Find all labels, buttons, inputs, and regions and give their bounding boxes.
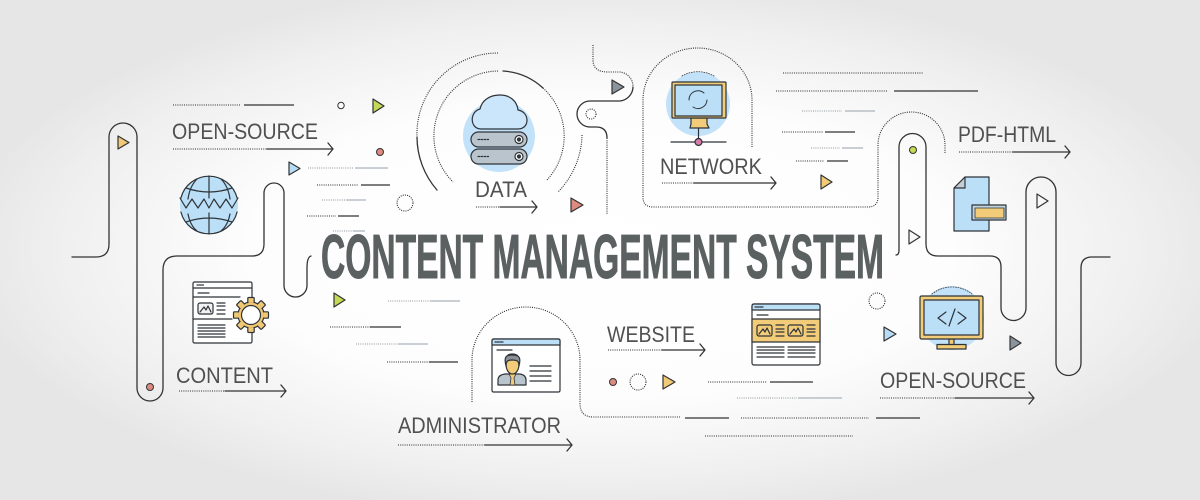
S-curve connector [577,45,633,215]
label: website: WEBSITE [607,322,695,347]
left connector line [72,123,311,401]
marker: triangles [118,80,1048,389]
label: content: CONTENT [176,363,273,388]
right connector line [896,134,1110,376]
icon: cloud server [463,95,535,172]
text rules: upper left [173,105,390,231]
label: pdf-html [958,122,1070,158]
network dotted frame [643,48,945,207]
gear [234,298,268,332]
text rules: lower right [685,382,920,436]
administrator dotted frame [472,307,680,417]
icon: content window and gear [193,282,268,343]
label: open-source left: OPEN-SOURCE [172,119,318,144]
marker: dots [146,102,916,391]
icon: network monitor [666,72,730,146]
label: pdf-html: PDF-HTML [958,122,1056,147]
label: network [660,154,776,189]
label: open-source right [880,368,1034,404]
label: network: NETWORK [660,154,762,179]
icon: globe [180,176,238,234]
icon: code monitor [920,286,984,350]
data rings [417,53,582,192]
icon: document [954,177,1006,231]
label: data: DATA [475,177,527,202]
label: administrator: ADMINISTRATOR [398,413,561,438]
icon: administrator profile [492,339,560,392]
label: open-source right: OPEN-SOURCE [880,368,1026,393]
label: open-source left [172,119,333,155]
marker: dotted circles [397,109,885,390]
label: data [475,177,537,213]
text rules: lower left [330,301,460,362]
text rules: upper right [776,73,978,161]
label: administrator [398,413,572,451]
icon: website window [752,304,820,365]
